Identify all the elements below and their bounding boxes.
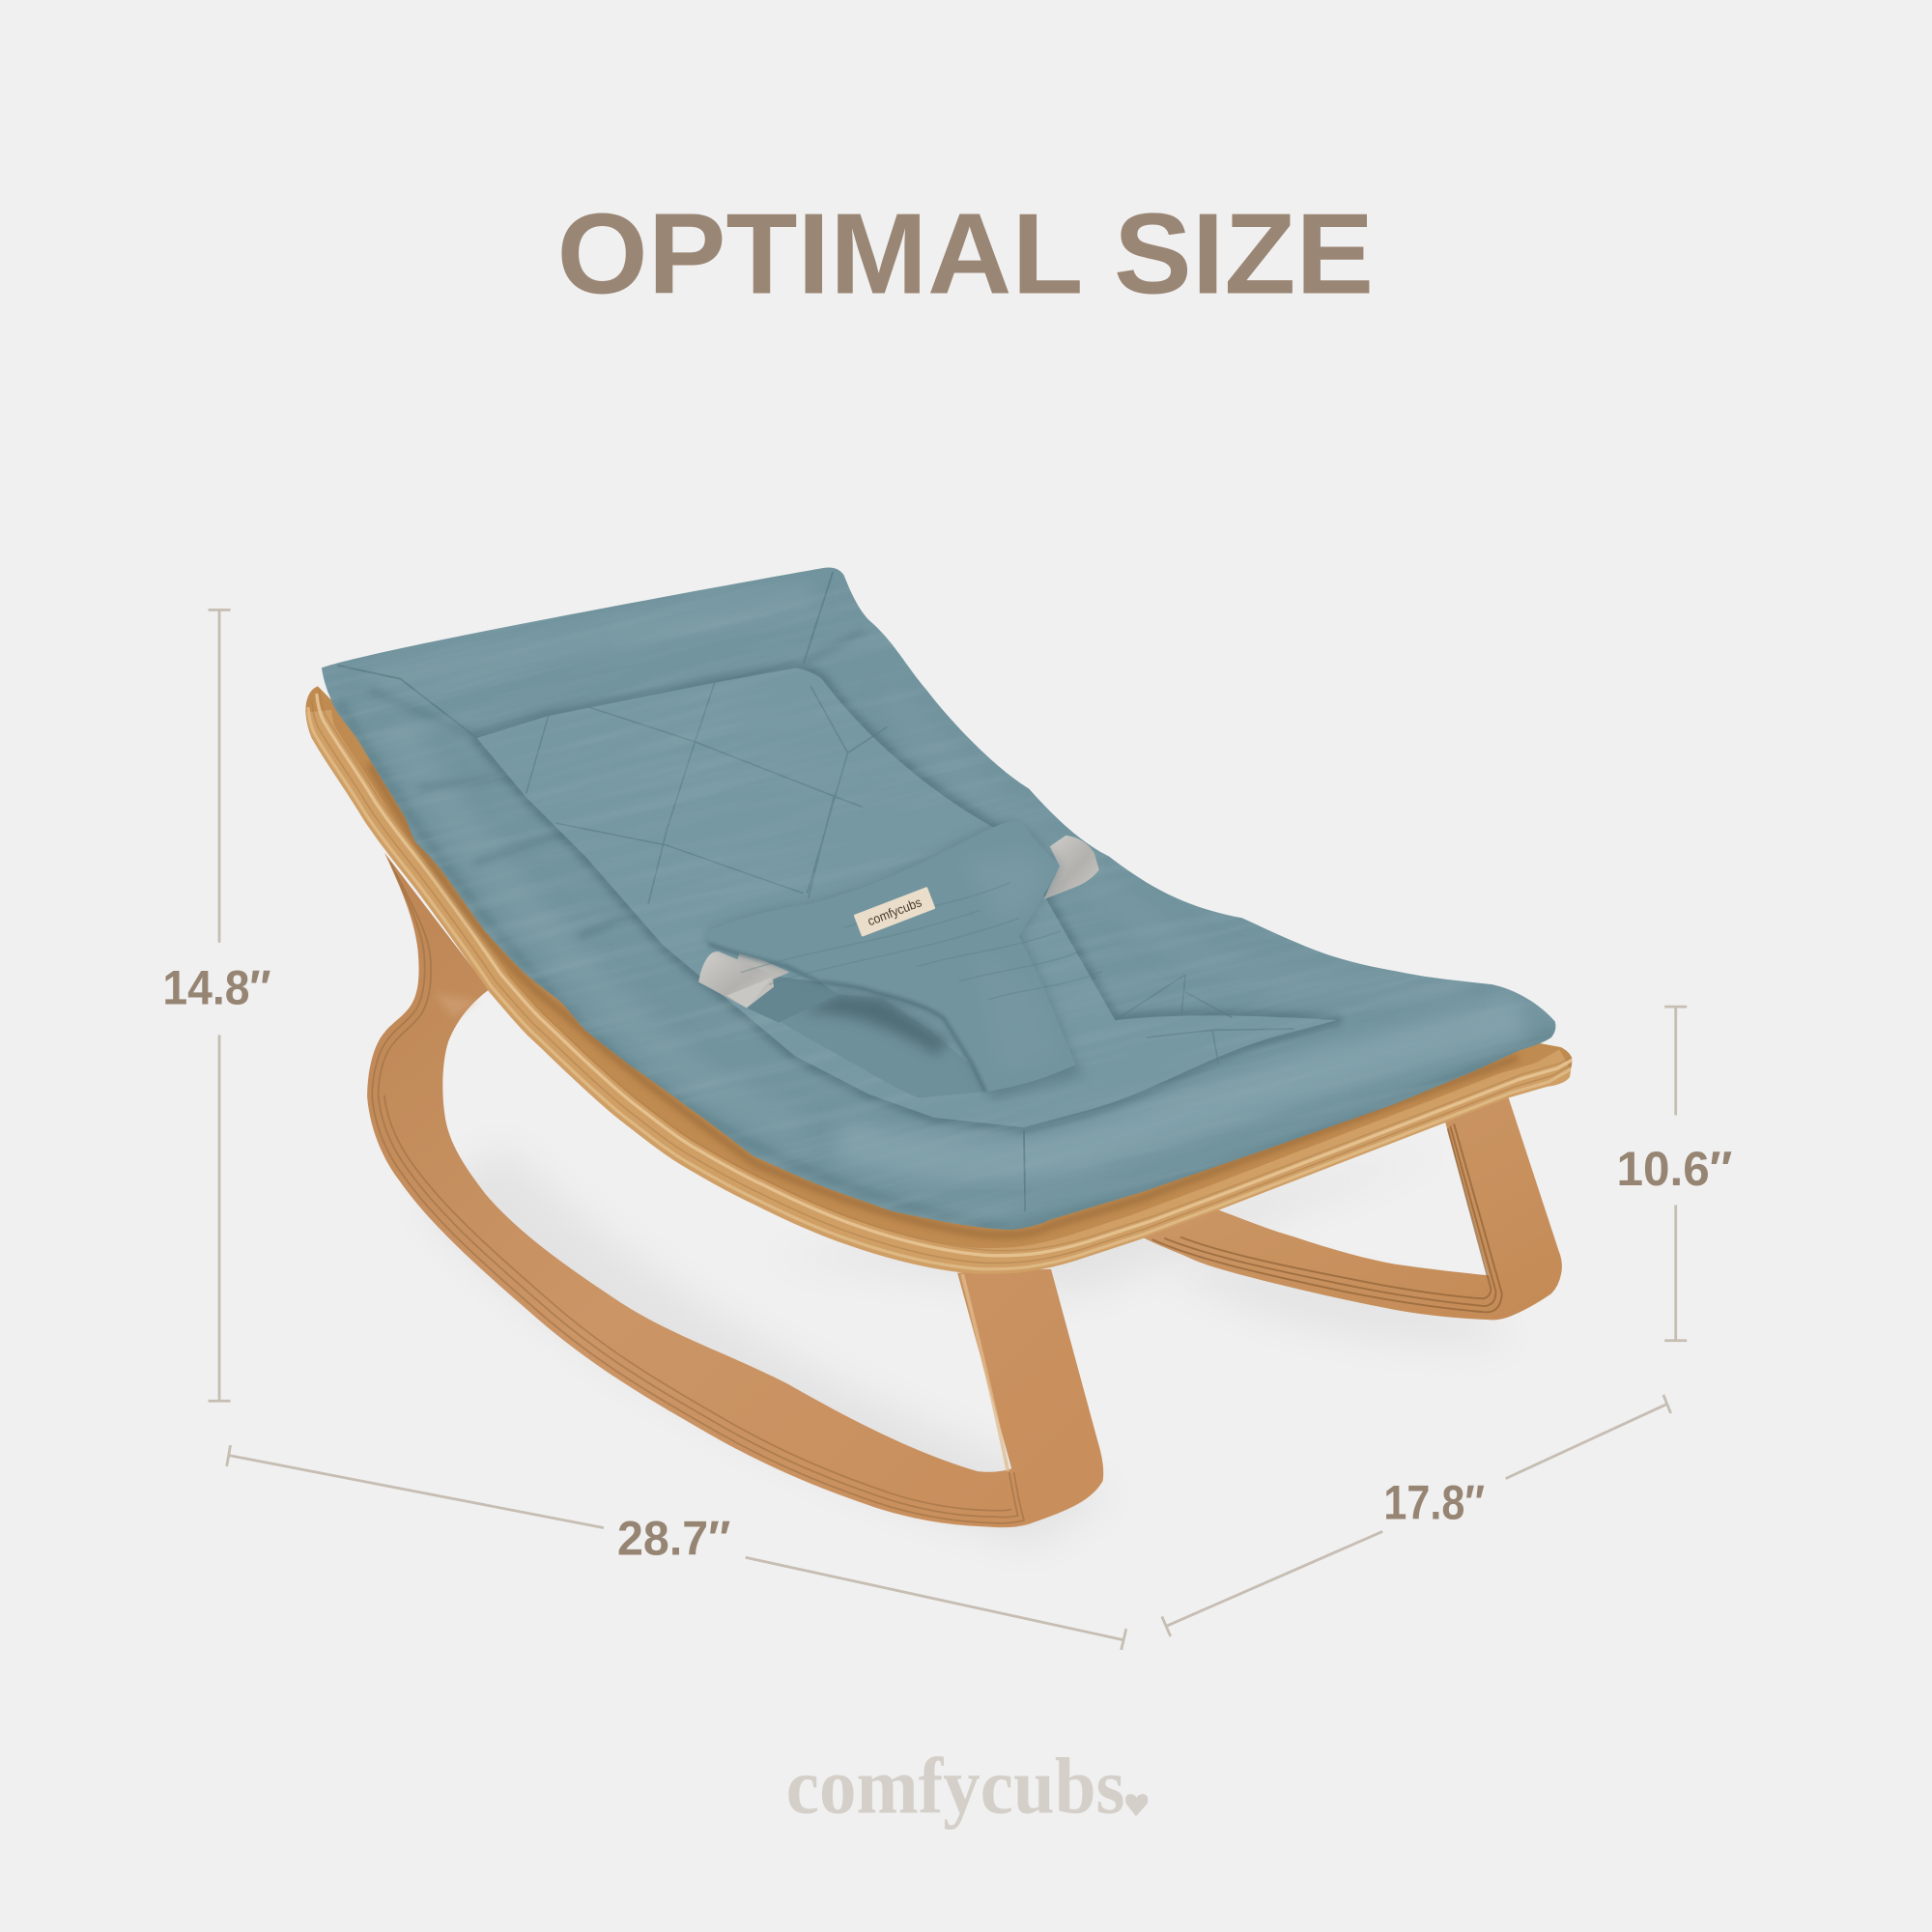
seat well under harness [779, 994, 985, 1097]
harness strap: far ribbon [1043, 836, 1099, 899]
ground shadow [419, 1146, 1516, 1547]
sheen [434, 993, 478, 1018]
harness [708, 820, 1103, 1099]
dimension: length 28.7 inches [227, 1445, 1126, 1650]
lower edge shading [339, 702, 1555, 1230]
title: OPTIMAL SIZE [557, 191, 1374, 319]
front roll highlight [838, 1016, 1521, 1160]
wooden seat board [283, 666, 1589, 1293]
harness strap: near ribbon [698, 950, 790, 1008]
dimension: seat height 10.6 inches: 10.6″ [1616, 1142, 1732, 1196]
dimension: seat height 10.6 inches [1616, 1007, 1732, 1341]
left roll highlight [394, 727, 801, 1127]
icon: heart [1125, 1794, 1148, 1816]
dimension: height 14.8 inches [162, 610, 271, 1401]
dimension: length 28.7 inches: 28.7″ [617, 1512, 730, 1566]
right roll highlight [887, 690, 1466, 992]
harness drop shadow [708, 820, 1084, 1099]
roll crease shadows [370, 631, 863, 936]
corner seams [337, 572, 1025, 1211]
brand tag [854, 887, 935, 937]
brand logo: comfycubs [786, 1741, 1125, 1830]
left rocker [367, 853, 1103, 1527]
quilting seams [526, 683, 1293, 1065]
dimension: width 17.8 inches [1162, 1395, 1671, 1636]
dimension: width 17.8 inches: 17.8″ [1383, 1476, 1485, 1530]
inner panel recess shadow [477, 668, 1337, 1127]
dimension: height 14.8 inches: 14.8″ [162, 961, 271, 1015]
brand tag: comfycubs [866, 895, 923, 928]
ply stripes [1152, 1123, 1502, 1312]
harness lower flap [747, 976, 838, 1023]
cushion shadow on wood [370, 764, 1518, 1236]
right rocker [1142, 1096, 1562, 1320]
ply stripes on the rocker [372, 863, 1024, 1523]
fabric wrinkles [346, 595, 1436, 1224]
product: baby rocker bouncer [305, 568, 1573, 1533]
top roll highlight [370, 594, 813, 680]
cushion [322, 568, 1555, 1240]
cushion body [322, 568, 1555, 1230]
well shadow [801, 994, 949, 1055]
light ply stripe on the front leg [962, 1274, 1008, 1471]
inner quilted panel [477, 668, 1337, 1127]
